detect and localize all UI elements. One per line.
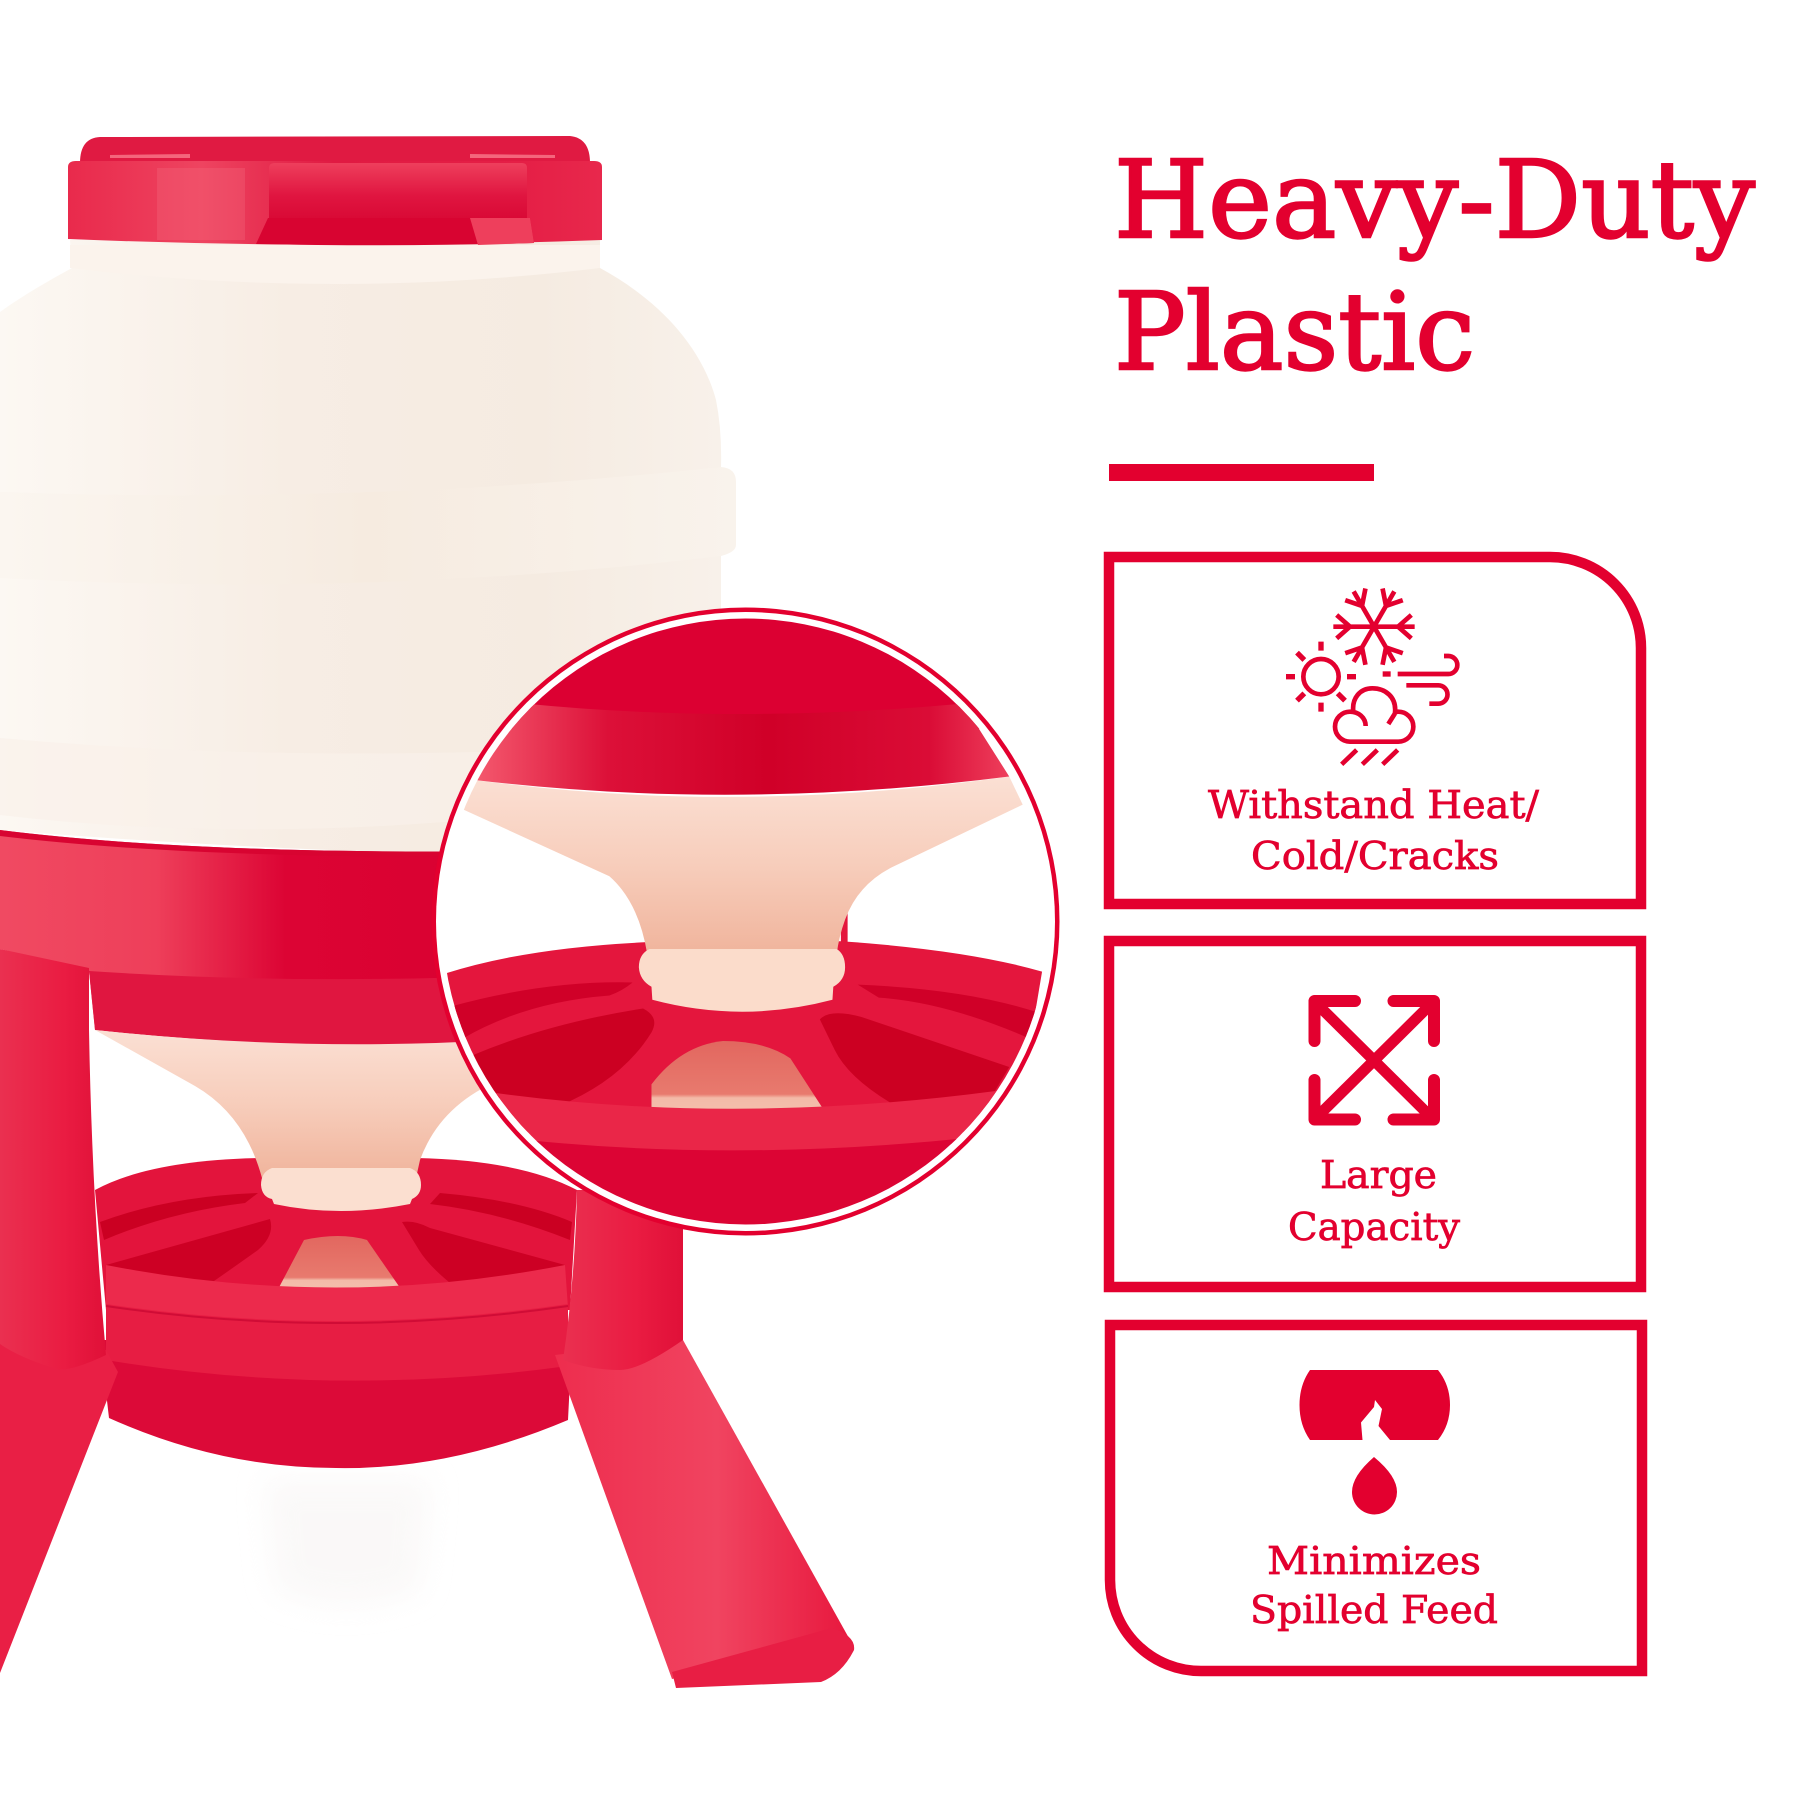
zoom inset circle: [420, 590, 1077, 1236]
left leg: [0, 1330, 118, 1673]
feature card: capacity: [1109, 941, 1641, 1287]
right leg: [555, 1340, 854, 1688]
inset band: [475, 704, 1009, 795]
label: Cold/Cracks: [1251, 834, 1499, 878]
right post: [563, 1190, 683, 1370]
bowl: [100, 1340, 572, 1468]
feed container body: [0, 240, 736, 854]
tray: [95, 1158, 577, 1381]
icon: cracked block and drop: [1300, 1370, 1450, 1514]
label: Large: [1320, 1153, 1437, 1197]
inset collar: [639, 949, 845, 1012]
label: [1250, 1539, 1498, 1632]
title: Heavy-Duty: [1114, 139, 1756, 263]
title: [1114, 139, 1756, 395]
red lid: [68, 136, 602, 245]
label: [1208, 783, 1539, 878]
left post: [0, 949, 106, 1369]
feature card: weather resistance: [1109, 557, 1641, 904]
feature card: spill control: [1110, 1325, 1642, 1671]
label: Minimizes: [1267, 1539, 1481, 1583]
label: Capacity: [1288, 1205, 1461, 1249]
inset back post: [840, 913, 848, 942]
heading rule: [1109, 464, 1374, 481]
red base ring and band: [0, 830, 520, 1047]
label: [1288, 1153, 1461, 1249]
product photo: poultry feeder: [0, 136, 854, 1688]
inset funnel: [462, 776, 1023, 954]
funnel collar: [261, 1168, 421, 1211]
label: Withstand Heat/: [1208, 783, 1539, 827]
icon: snow, sun, wind and rain: [1286, 586, 1457, 764]
inset dome: [512, 618, 980, 729]
floor shadow: [265, 1480, 430, 1605]
title: Plastic: [1114, 271, 1475, 395]
icon: expand arrows: [1314, 1001, 1434, 1120]
label: Spilled Feed: [1250, 1588, 1498, 1632]
inset tray: [444, 941, 1042, 1132]
funnel: [95, 1030, 500, 1178]
